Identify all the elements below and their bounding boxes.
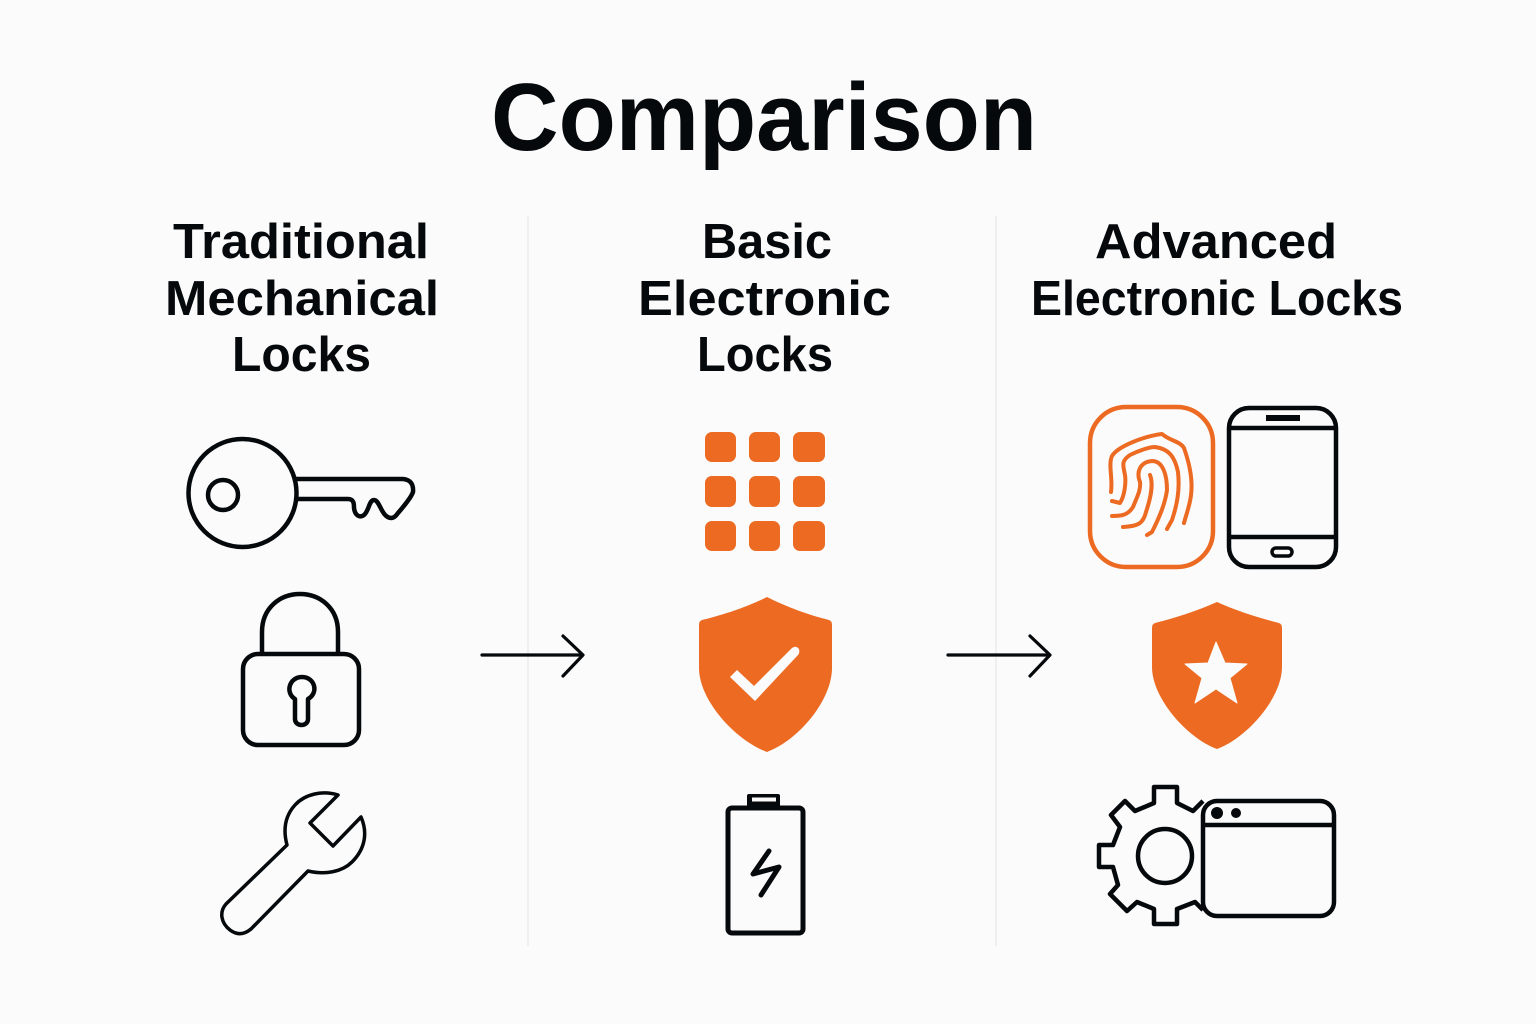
icon: smartphone xyxy=(1229,408,1336,567)
title: Comparison xyxy=(491,64,1037,171)
heading: traditional mechanical locks: Locks xyxy=(232,328,371,382)
icon: fingerprint xyxy=(1090,407,1213,567)
heading: basic electronic locks: Electronic xyxy=(638,272,891,326)
icon: shield with check xyxy=(699,597,832,752)
icon: gear and browser window xyxy=(1099,787,1334,924)
browser window xyxy=(1203,801,1334,916)
arrow: mechanical to basic xyxy=(482,636,583,676)
heading: advanced electronic locks: Advanced xyxy=(1095,215,1337,269)
icon: keypad xyxy=(705,432,825,551)
heading: basic electronic locks: Locks xyxy=(697,328,833,382)
heading: advanced electronic locks xyxy=(1031,215,1403,326)
heading: basic electronic locks: Basic xyxy=(702,215,832,269)
heading: traditional mechanical locks: Traditional xyxy=(173,215,429,269)
icon: battery xyxy=(728,794,803,933)
icon: padlock xyxy=(243,594,359,745)
icon: shield with star xyxy=(1152,602,1282,749)
icon: wrench xyxy=(222,793,365,934)
heading: basic electronic locks xyxy=(638,215,891,382)
gear xyxy=(1099,787,1203,924)
heading: traditional mechanical locks xyxy=(165,215,439,382)
heading: traditional mechanical locks: Mechanical xyxy=(165,272,439,326)
heading: advanced electronic locks: Electronic Locks xyxy=(1031,272,1403,326)
icon: key xyxy=(188,439,413,547)
arrow: basic to advanced xyxy=(948,636,1050,676)
